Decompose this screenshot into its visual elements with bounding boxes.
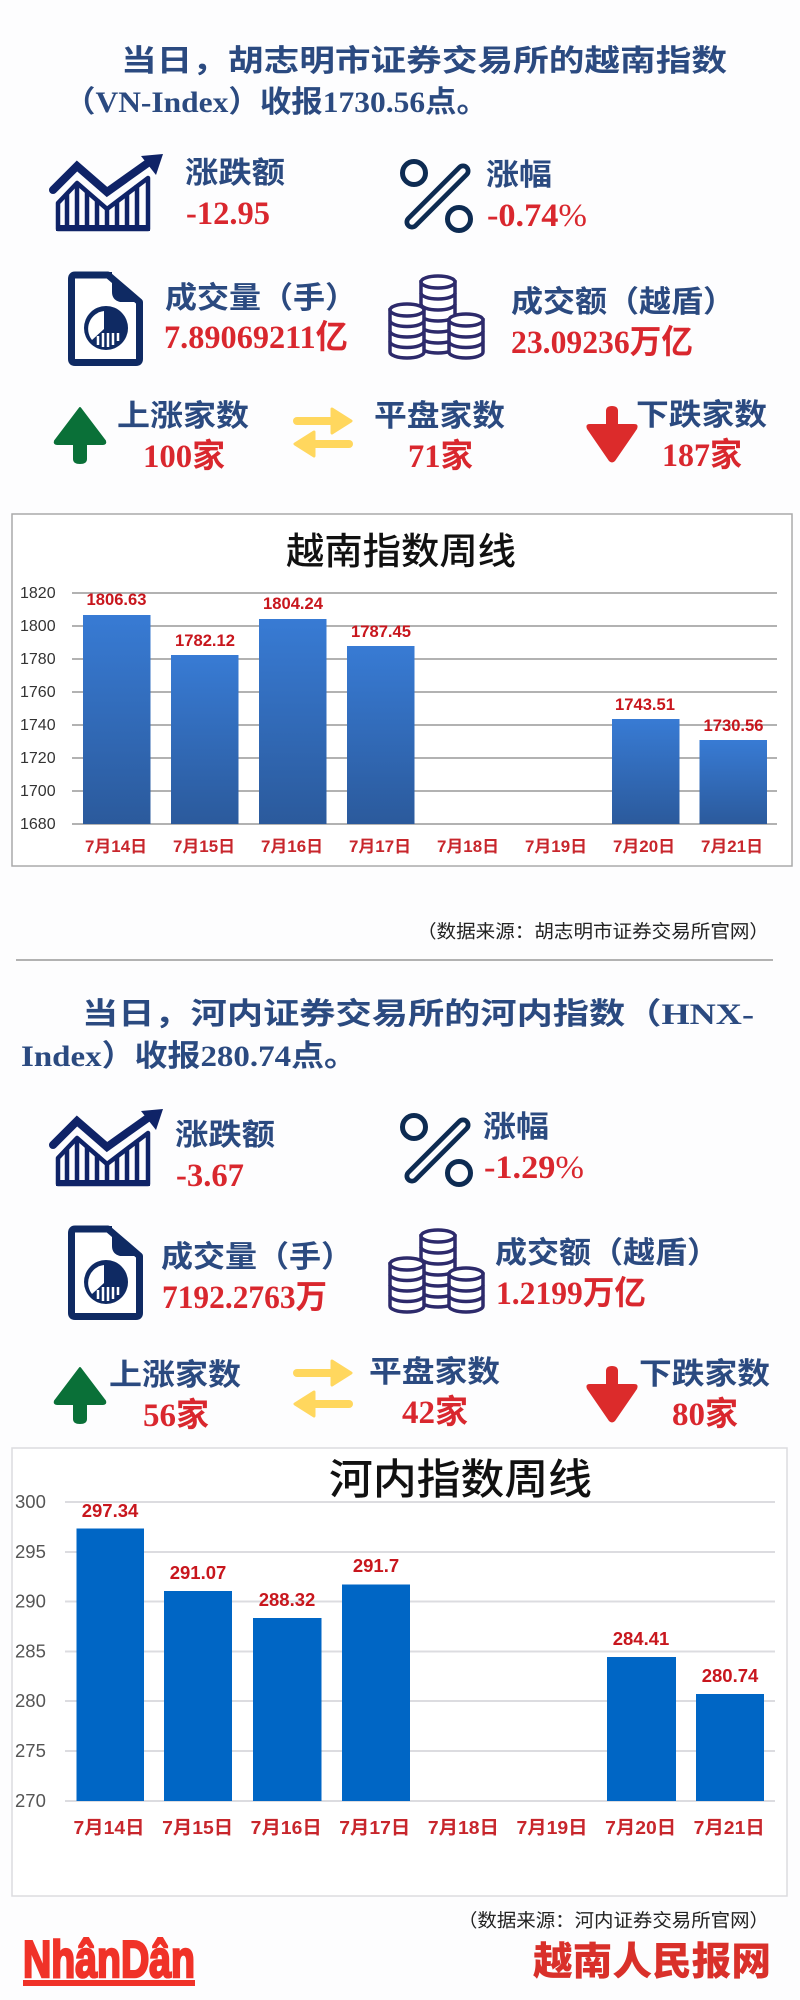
stat: volume: 成交量（手） [165, 282, 357, 315]
stat: change amount [185, 157, 285, 232]
heading: VN-Index close: 当日，胡志明市证券交易所的越南指数 [121, 45, 727, 78]
y axis labels: 290 [15, 1590, 46, 1612]
stat: volume: 7.89069211亿 [164, 319, 348, 356]
category labels: 7月17日 [349, 838, 411, 856]
y axis labels: 280 [15, 1690, 46, 1711]
source note: HNX: （数据来源：河内证券交易所官网） [458, 1910, 769, 1931]
heading: HNX-Index close: 当日，河内证券交易所的河内指数（HNX- [82, 998, 754, 1031]
stat: advancers [117, 400, 249, 475]
category labels [74, 1817, 765, 1838]
stat: turnover: 成交额（越盾） [511, 286, 735, 319]
y axis labels: 1780 [20, 651, 56, 668]
stat: advancers: 上涨家数 [117, 400, 249, 433]
stat: decliners [636, 399, 767, 474]
heading: HNX-Index close: Index）收报280.74点。 [21, 1040, 357, 1073]
stat: change percent [483, 1111, 584, 1186]
y axis labels: 1680 [20, 816, 56, 833]
stat: advancers [109, 1359, 241, 1434]
icon: coin stacks [390, 276, 483, 358]
stat: turnover [511, 286, 735, 361]
stat: change amount: -12.95 [186, 196, 270, 232]
source note: HOSE: （数据来源：胡志明市证券交易所官网） [417, 921, 769, 942]
chart title: 越南指数周线 [286, 531, 516, 572]
y axis labels: 1720 [20, 750, 56, 767]
stat: volume [164, 282, 357, 356]
y axis labels: 275 [15, 1740, 46, 1761]
stat: decliners: 下跌家数 [636, 399, 767, 432]
icon: down arrow [586, 1366, 638, 1422]
stat: turnover: 23.09236万亿 [511, 324, 693, 361]
section: HNX-Index summary [21, 998, 770, 1434]
category labels [85, 838, 763, 856]
stat: change percent [486, 159, 587, 234]
stat: unchanged: 71家 [408, 438, 473, 475]
value labels: 1730.56 [704, 716, 764, 735]
category labels: 7月16日 [251, 1817, 322, 1838]
icon: coin stacks [390, 1230, 483, 1312]
stat: turnover [495, 1237, 719, 1312]
value labels: 288.32 [259, 1589, 315, 1610]
y axis labels: 1740 [20, 717, 56, 734]
y axis labels: 270 [15, 1790, 46, 1811]
stat: decliners [639, 1358, 770, 1433]
stat: change percent: -1.29% [484, 1150, 584, 1186]
value labels: 291.7 [353, 1555, 399, 1576]
y axis labels: 1700 [20, 783, 56, 800]
stat: volume [161, 1241, 353, 1316]
stat: unchanged: 平盘家数 [369, 1356, 500, 1389]
stat: advancers: 56家 [143, 1397, 209, 1434]
stat: unchanged [369, 1356, 500, 1431]
y axis labels [20, 585, 56, 833]
stat: change amount: 涨跌额 [185, 157, 285, 190]
y axis labels [15, 1491, 46, 1811]
value labels: 284.41 [613, 1628, 669, 1649]
icon: down arrow [586, 406, 638, 462]
stat: change percent: -0.74% [487, 198, 587, 234]
value labels: 1806.63 [86, 590, 146, 609]
y axis labels: 300 [15, 1491, 46, 1512]
category labels: 7月18日 [428, 1817, 499, 1838]
panel: VN-Index weekly bar chart [12, 514, 792, 866]
stat: change percent: 涨幅 [483, 1111, 549, 1144]
category labels: 7月18日 [437, 838, 499, 856]
bars [76, 1528, 764, 1801]
stat: volume: 7192.2763万 [162, 1280, 327, 1316]
category labels: 7月20日 [605, 1817, 676, 1838]
panel: HNX-Index weekly bar chart [12, 1448, 787, 1896]
stat: change percent: 涨幅 [486, 159, 552, 192]
heading: HNX-Index close [21, 998, 754, 1073]
value labels [82, 1500, 759, 1686]
value labels: 297.34 [82, 1500, 139, 1521]
icon: up arrow [55, 1368, 105, 1423]
y axis labels: 1760 [20, 684, 56, 701]
stat: change amount: -3.67 [176, 1158, 244, 1194]
stat: change amount [175, 1119, 275, 1194]
category labels: 7月14日 [74, 1817, 144, 1838]
stat: decliners: 下跌家数 [639, 1358, 770, 1391]
value labels: 1787.45 [351, 622, 411, 641]
stat: unchanged: 平盘家数 [374, 400, 505, 433]
stat: unchanged: 42家 [402, 1394, 468, 1431]
y axis labels: 295 [15, 1541, 46, 1562]
masthead: Vietnamese People's Daily online: 越南人民报网 [533, 1941, 771, 1984]
stat: turnover: 成交额（越盾） [495, 1237, 719, 1270]
category labels: 7月17日 [339, 1817, 410, 1838]
category labels: 7月19日 [516, 1817, 588, 1838]
stat: turnover: 1.2199万亿 [496, 1275, 646, 1312]
category labels: 7月21日 [701, 838, 763, 856]
icon: rising chart [53, 1109, 163, 1186]
stat: advancers: 100家 [143, 438, 225, 475]
heading: VN-Index close [64, 45, 727, 119]
icon: unchanged arrows [295, 1361, 351, 1416]
logo: Nhan Dan: NhânDân [23, 1931, 195, 1989]
value labels [86, 590, 764, 735]
category labels: 7月15日 [162, 1817, 233, 1838]
stat: unchanged [374, 400, 505, 475]
heading: VN-Index close: （VN-Index）收报1730.56点。 [64, 86, 488, 119]
category labels: 7月14日 [85, 838, 147, 856]
value labels: 1743.51 [615, 695, 675, 714]
icon: percent [402, 162, 470, 230]
value labels: 1782.12 [175, 631, 235, 650]
category labels: 7月21日 [694, 1817, 765, 1838]
value labels: 291.07 [170, 1562, 226, 1583]
category labels: 7月16日 [261, 838, 323, 856]
value labels: 280.74 [702, 1665, 759, 1686]
category labels: 7月15日 [173, 838, 235, 856]
y axis labels: 1800 [20, 618, 56, 635]
icon: unchanged arrows [295, 409, 351, 456]
category labels: 7月19日 [525, 838, 587, 856]
section: VN-Index summary [53, 45, 767, 475]
stat: decliners: 80家 [672, 1396, 738, 1433]
stat: volume: 成交量（手） [161, 1241, 353, 1274]
bars [83, 615, 767, 824]
icon: document with pie chart [72, 272, 143, 362]
category labels: 7月20日 [613, 838, 675, 856]
icon: percent [402, 1116, 470, 1184]
stat: decliners: 187家 [662, 437, 742, 474]
icon: document with pie chart [72, 1226, 143, 1316]
stat: change amount: 涨跌额 [175, 1119, 275, 1152]
value labels: 1804.24 [263, 594, 324, 613]
icon: rising chart [53, 154, 163, 231]
chart title: 河内指数周线 [329, 1456, 592, 1503]
stat: advancers: 上涨家数 [109, 1359, 241, 1392]
y axis labels: 285 [15, 1640, 46, 1662]
icon: up arrow [55, 408, 105, 463]
y axis labels: 1820 [20, 585, 56, 602]
